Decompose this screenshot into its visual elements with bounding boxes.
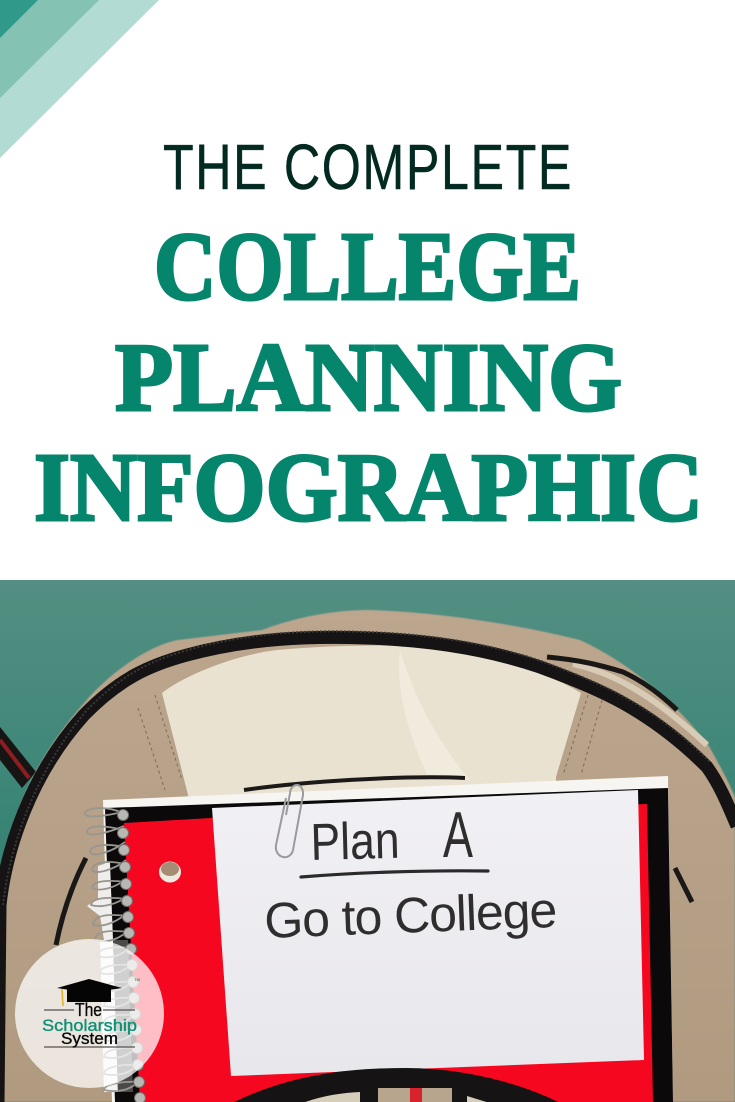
icon: graduation cap <box>57 979 122 1006</box>
zipper teeth highlight <box>3 631 710 905</box>
punched hole inner <box>161 862 179 876</box>
corner decoration: stacked green diagonal bands <box>0 0 159 158</box>
notebook white edge <box>103 776 673 1102</box>
backpack strap <box>0 727 36 788</box>
white paper strip under badge <box>100 940 118 1092</box>
pocket strap <box>378 1088 452 1102</box>
light piping between zippers <box>573 664 707 745</box>
notebook red panel <box>124 804 653 1102</box>
spiral holes <box>118 810 146 1102</box>
punched hole <box>159 862 181 882</box>
trademark: TM <box>134 977 140 982</box>
bottom pocket zipper <box>230 1068 562 1102</box>
handwritten: Plan: Plan <box>310 812 400 872</box>
upper right zipper <box>547 657 677 710</box>
logo line rules <box>44 1010 135 1047</box>
logo text: The: The <box>75 1000 102 1020</box>
notebook <box>87 776 673 1102</box>
photo: backpack with notebook <box>0 580 735 1102</box>
strap red stripe <box>0 740 29 778</box>
notebook black cover <box>105 788 673 1102</box>
paper clip <box>276 785 303 857</box>
logo text: System: System <box>61 1029 118 1048</box>
green wall background <box>0 580 735 1102</box>
handwritten underline <box>301 871 488 877</box>
handwritten: A: A <box>443 798 473 871</box>
small pocket zipper behind notebook <box>244 777 465 790</box>
side strap left <box>56 858 86 945</box>
title <box>34 131 703 542</box>
pocket interior right <box>467 1096 493 1102</box>
title line: PLANNING: PLANNING <box>115 324 622 432</box>
spiral binding coils <box>85 808 140 1091</box>
side strap right <box>675 868 692 902</box>
main zipper arc <box>0 637 735 1102</box>
cream back panel <box>162 645 581 830</box>
badge circle <box>15 939 164 1088</box>
handwritten: Go to College: Go to College <box>263 882 558 949</box>
logo badge: The Scholarship System <box>15 939 164 1088</box>
note paper <box>212 790 644 1076</box>
logo text: Scholarship: Scholarship <box>42 1016 137 1035</box>
title line: THE COMPLETE: THE COMPLETE <box>163 131 573 203</box>
pocket interior left <box>300 1092 360 1102</box>
grey lower binding <box>113 940 133 1092</box>
title line: INFOGRAPHIC: INFOGRAPHIC <box>34 434 703 542</box>
torn paper on spiral <box>87 862 113 940</box>
stitching lines <box>138 695 602 790</box>
title line: COLLEGE: COLLEGE <box>154 213 581 321</box>
panel fold shading <box>399 650 470 780</box>
strap red stripe <box>410 1088 422 1102</box>
backpack body <box>0 610 735 1102</box>
